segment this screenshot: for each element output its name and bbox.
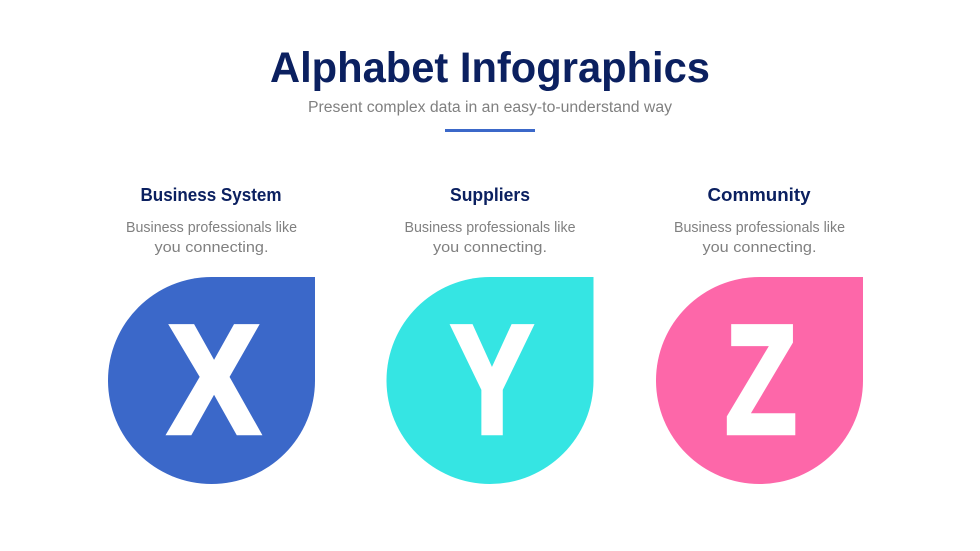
heading: Suppliers: Suppliers — [450, 185, 530, 205]
text block: Y description: Business professionals like — [404, 219, 576, 236]
text block: Y description: you connecting. — [433, 239, 547, 256]
title underline — [445, 129, 535, 132]
letter X: X — [168, 294, 260, 467]
text block: X description: you connecting. — [154, 239, 268, 256]
text block: Y description — [404, 219, 576, 256]
subtitle: Present complex data in an easy-to-understand way — [308, 99, 672, 116]
icon: turquoise drop — [386, 277, 594, 484]
panel: Z Community — [656, 185, 863, 484]
title: Alphabet Infographics — [270, 44, 710, 92]
heading: Community: Community — [708, 185, 810, 205]
letter Z: Z — [725, 293, 797, 467]
icon: blue drop — [108, 277, 315, 484]
heading: Business System: Business System — [140, 185, 282, 205]
text block: Z description — [674, 219, 845, 256]
text block: X description: Business professionals like — [126, 219, 297, 236]
panel: X Business System — [108, 185, 315, 484]
icon: pink drop — [656, 277, 863, 484]
panel: Y Suppliers — [386, 185, 594, 484]
text block: Z description: you connecting. — [702, 239, 816, 256]
text block: Z description: Business professionals like — [674, 219, 845, 236]
text block: X description — [126, 219, 297, 256]
letter Y: Y — [451, 293, 533, 466]
